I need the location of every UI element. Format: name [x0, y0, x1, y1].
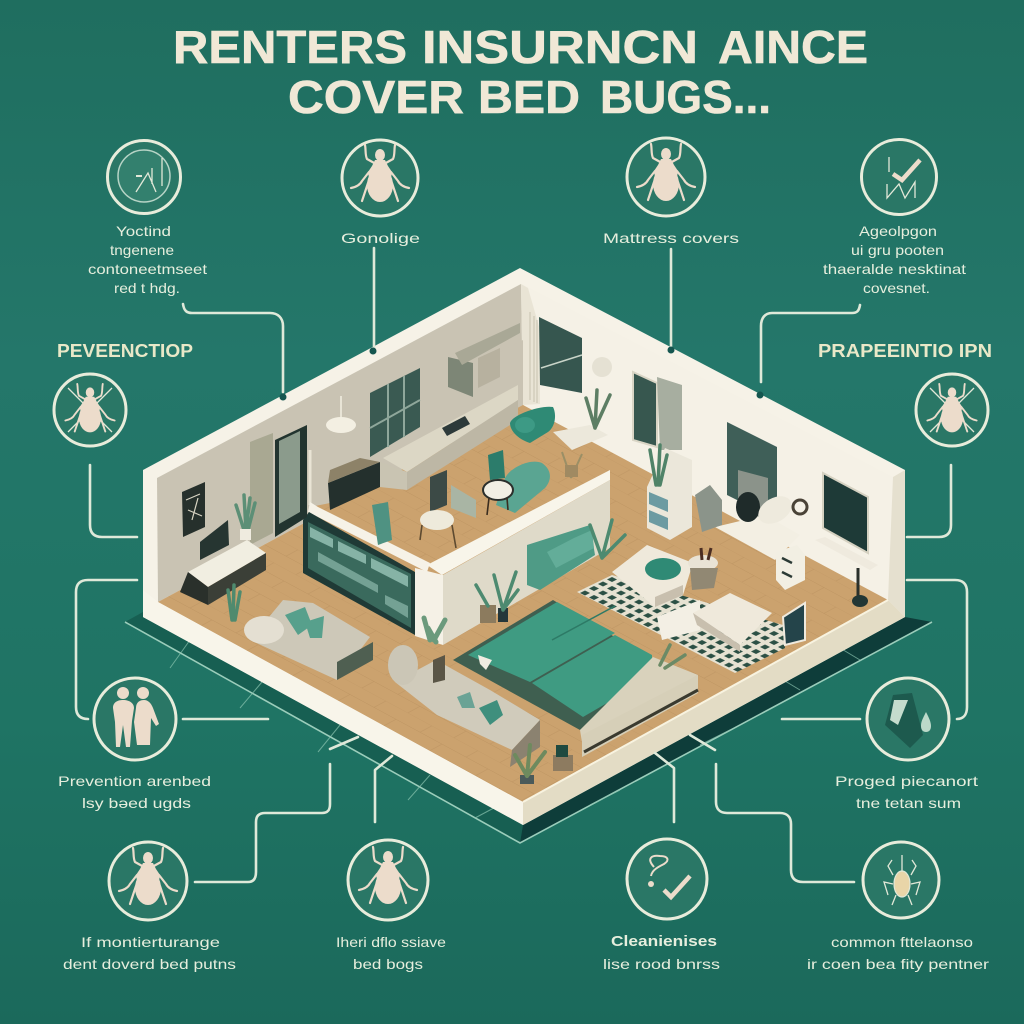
heading: left prevention: PEVEENCTIOP	[57, 341, 193, 361]
text: bottom label 1: dent doverd bed putns	[63, 956, 236, 972]
text: people label: lsy bəed ugds	[82, 795, 191, 811]
patterned rug	[577, 575, 785, 673]
title: COVER	[288, 71, 464, 123]
text: bottom label 1: If montierturange	[81, 934, 220, 950]
plant on console	[236, 495, 255, 540]
text: bottom label 2	[336, 934, 446, 972]
partition cream top	[308, 502, 430, 572]
right room bath and nook	[695, 485, 807, 560]
upper room living set	[372, 450, 550, 548]
text: top label 4: thaeralde nesktinat	[823, 261, 966, 277]
text: top label 3: Mattress covers	[603, 230, 739, 246]
upper room side table with plant	[553, 357, 612, 478]
text: top label 4: ui gru pooten	[851, 242, 944, 258]
text: top label 1: tngenene	[110, 242, 174, 258]
text: bottom label 4: common fttelaonso	[831, 934, 973, 950]
icon: bed bug, bottom row 1	[109, 842, 187, 920]
title: BUGS...	[600, 71, 771, 123]
small plant by partition	[424, 618, 445, 642]
text: top label 4: covesnet.	[863, 280, 930, 296]
heading: right prevention: PRAPEEINTIO IPN	[818, 341, 992, 361]
potted plants by wall	[476, 572, 518, 623]
icon: two people	[94, 678, 176, 760]
lounge sofa	[244, 600, 373, 680]
icon: bed bug, bottom row 2	[348, 840, 428, 920]
title: AINCE	[718, 21, 868, 73]
wall shelf with plant pot	[815, 537, 878, 607]
icon: question and checkmark	[627, 839, 707, 919]
back corner curtain	[521, 284, 540, 405]
tv and console table	[180, 520, 266, 605]
green bed	[453, 600, 698, 757]
wood floor	[158, 405, 888, 802]
front slab left face	[143, 590, 523, 825]
right wall end face	[888, 470, 905, 617]
title: INSURNCN	[422, 21, 698, 73]
glass partition panel	[303, 512, 415, 635]
icon: outlined bug	[863, 842, 939, 918]
text: bottom label 1	[63, 934, 236, 972]
text: top label 2: Gonolige	[341, 230, 420, 246]
icon: bed bug, top row 3	[627, 138, 705, 216]
text: droplet label: tne tetan sum	[856, 795, 961, 811]
upper room floor	[310, 405, 610, 565]
icon: magnifier badge, top row 1	[108, 140, 180, 214]
cream sofa on rug	[612, 545, 718, 607]
upper room window	[370, 368, 420, 457]
text: bottom label 2: Iheri dflo ssiave	[336, 934, 446, 950]
text: people label: Prevention arenbed	[58, 773, 211, 789]
partition wall face	[415, 480, 610, 645]
front corner plants	[515, 745, 573, 784]
connector lines	[76, 248, 967, 882]
air conditioner and cabinet	[448, 323, 520, 397]
text: top label 1: contoneetmseet	[88, 261, 207, 277]
title	[173, 21, 868, 123]
text: bottom label 3	[603, 933, 720, 972]
kitchen cabinet	[328, 458, 407, 510]
upper room partition wall	[310, 340, 523, 512]
left room door and panel	[250, 425, 307, 545]
dresser with plant	[647, 445, 692, 540]
text: bottom label 4	[807, 934, 989, 972]
bench against partition	[527, 520, 625, 590]
icon: document with droplet	[867, 678, 949, 760]
text: people label	[58, 773, 211, 811]
text: bottom label 4: ir coen bea fity pentner	[807, 956, 989, 972]
front slab right face	[523, 600, 905, 825]
text: top label 1: Yoctind	[116, 223, 171, 239]
text: top label 1: red t hdg.	[114, 280, 180, 296]
white radiator and ottoman	[657, 593, 805, 652]
floor plant	[228, 585, 240, 620]
isometric apartment cutaway	[143, 268, 905, 825]
text: top label 4: Ageolpgon	[859, 223, 937, 239]
text: bottom label 2: bed bogs	[353, 956, 423, 972]
white cabinet	[776, 545, 805, 590]
right interior wall	[522, 284, 893, 600]
ground shadow and grid under the apartment	[125, 612, 932, 843]
wall art	[182, 482, 205, 537]
icon: bed bug, top row 2	[342, 140, 418, 216]
pendant lamp	[326, 396, 356, 433]
title: BED	[478, 71, 580, 123]
text: droplet label	[835, 773, 978, 811]
upper room green armchair	[510, 407, 555, 443]
counter	[383, 385, 518, 490]
title: RENTERS	[173, 21, 407, 73]
connector end dots	[280, 346, 764, 400]
text: top label 1	[88, 223, 207, 296]
text: bottom label 3: Cleanienises	[611, 933, 717, 950]
text: bottom label 3: lise rood bnrss	[603, 956, 720, 972]
outer shell	[143, 268, 905, 825]
icon: crossed-out bug, right	[916, 374, 988, 446]
front sofa	[388, 645, 540, 767]
left interior wall	[157, 284, 523, 602]
text: top label 4	[823, 223, 966, 296]
right wall windows	[539, 317, 868, 553]
icon: checkmark document, top row 4	[862, 140, 936, 214]
text: droplet label: Proged piecanort	[835, 773, 978, 789]
icon: crossed-out bug, left	[54, 374, 126, 446]
